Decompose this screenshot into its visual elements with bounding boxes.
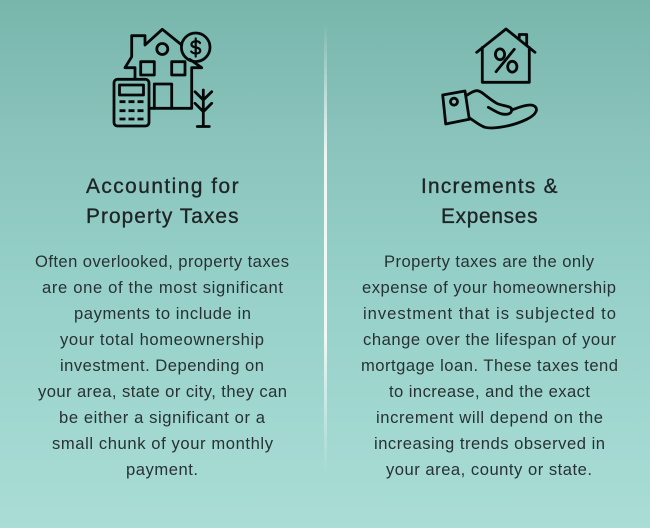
text block: tax changes over loan lifespan: your area, county or state. bbox=[386, 460, 592, 479]
text block: property taxes overview: investment. Depending on bbox=[60, 356, 264, 375]
panel: increments and expenses bbox=[361, 29, 618, 479]
text block: tax changes over loan lifespan: mortgage loan. These taxes tend bbox=[361, 356, 618, 375]
text block: tax changes over loan lifespan: increasing trends observed in bbox=[374, 434, 605, 453]
text block: tax changes over loan lifespan bbox=[361, 252, 618, 479]
heading: accounting for property taxes: Property Taxes bbox=[86, 205, 238, 228]
text block: tax changes over loan lifespan: to increase, and the exact bbox=[389, 382, 590, 401]
text block: property taxes overview: be either a significant or a bbox=[59, 408, 266, 427]
text block: property taxes overview: are one of the most significant bbox=[42, 278, 283, 297]
text block: tax changes over loan lifespan: change over the lifespan of your bbox=[363, 330, 616, 349]
text block: property taxes overview: payments to include in bbox=[74, 304, 251, 323]
vertical divider bbox=[324, 22, 327, 472]
text block: property taxes overview: Often overlooked, property taxes bbox=[35, 252, 289, 271]
heading: accounting for property taxes bbox=[86, 175, 239, 228]
heading: increments and expenses: Increments & bbox=[421, 175, 558, 198]
text block: tax changes over loan lifespan: increment will depend on the bbox=[376, 408, 603, 427]
heading: increments and expenses: Expenses bbox=[441, 205, 538, 228]
text block: property taxes overview: your total homeownership bbox=[60, 330, 264, 349]
text block: property taxes overview: small chunk of your monthly bbox=[52, 434, 274, 453]
text block: property taxes overview: payment. bbox=[126, 460, 198, 479]
icon: percent house over open hand bbox=[443, 29, 536, 128]
icon: house with calculator, dollar coin and plant bbox=[114, 29, 212, 126]
text block: tax changes over loan lifespan: Property taxes are the only bbox=[384, 252, 595, 271]
text block: tax changes over loan lifespan: investment that is subjected to bbox=[363, 304, 616, 323]
heading: increments and expenses bbox=[421, 175, 558, 228]
text block: tax changes over loan lifespan: expense of your homeownership bbox=[362, 278, 616, 297]
text block: property taxes overview: your area, state or city, they can bbox=[38, 382, 287, 401]
heading: accounting for property taxes: Accounting for bbox=[86, 175, 239, 198]
panel: accounting for property taxes bbox=[35, 29, 289, 479]
text block: property taxes overview bbox=[35, 252, 289, 479]
